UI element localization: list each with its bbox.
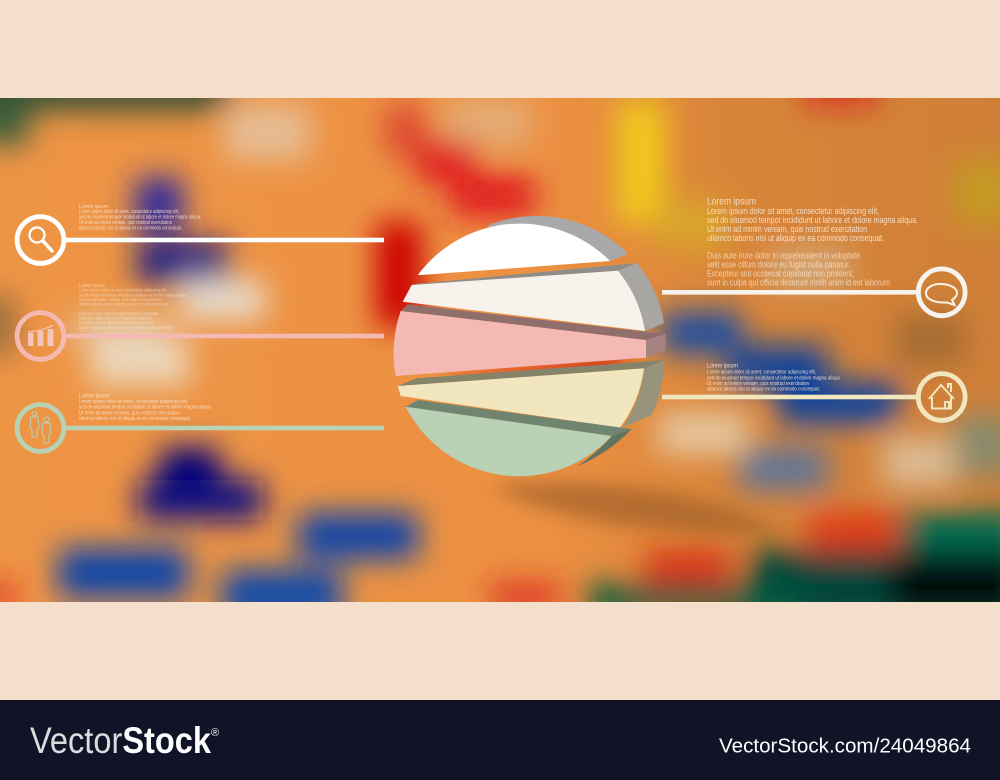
text block: velit esse cillum dolore eu fugiat nulla pariatur.: [707, 259, 850, 269]
red seen through slice gap: [440, 360, 640, 380]
text block: Lorem ipsum: [79, 283, 105, 289]
text block: sunt in culpa qui officia deserunt mollit anim id est laborum: [707, 277, 890, 287]
text block: Ut enim ad minim veniam, quis nostrud exercitation: [707, 224, 867, 234]
text block: sed do eiusmod tempor incididunt ut labore et dolore magna aliqua.: [707, 215, 918, 225]
text block: Ut enim ad minim veniam, quis nostrud exercitation: [79, 220, 172, 226]
bottom beige band: [0, 602, 1000, 700]
text block: ullamco laboris nisi ut aliquip ex ea commodo consequat.: [79, 416, 191, 422]
registered mark: ®: [211, 727, 219, 739]
connector line: [66, 238, 384, 242]
text block: Lorem ipsum dolor sit amet, consectetur adipiscing elit,: [707, 206, 879, 216]
slice 1: white: [418, 216, 628, 275]
text block: [79, 283, 187, 330]
callout 2: chart: [17, 283, 384, 359]
connector line: [662, 395, 918, 399]
text block: Lorem ipsum: [79, 392, 110, 400]
text block: [707, 196, 918, 287]
text block: Lorem ipsum dolor sit amet, consectetur adipiscing elit,: [707, 370, 816, 376]
text block: Ut enim ad minim veniam, quis nostrud exercitation: [79, 410, 180, 416]
footer id: VectorStock.com/24049864: [719, 736, 971, 758]
text block: velit esse cillum dolore eu fugiat nulla pariatur.: [79, 316, 152, 320]
footer logo: VectorStock: [30, 720, 211, 761]
text block: Excepteur sint occaecat cupidatat non proident,: [707, 268, 854, 278]
connector line: [662, 290, 918, 295]
callout 1: search: [17, 204, 384, 263]
text block: Lorem ipsum dolor sit amet, consectetur adipiscing elit,: [79, 399, 188, 405]
icon: magnifier: [17, 217, 64, 263]
icon: speech bubble: [918, 269, 965, 316]
callout 5: house: [662, 362, 965, 420]
text block: sed do eiusmod tempor incididunt ut labore et dolore magna aliqua.: [79, 405, 212, 411]
text block: Ut enim ad minim veniam, quis nostrud exercitation: [79, 297, 161, 302]
icon: growth bars: [17, 313, 64, 359]
icon: house: [918, 374, 965, 420]
text block: Duis aute irure dolor in reprehenderit in voluptate: [707, 250, 860, 260]
text block: Lorem ipsum: [79, 204, 108, 210]
text block: [79, 392, 212, 422]
text block: ullamco laboris nisi ut aliquip ex ea commodo consequat.: [707, 233, 884, 243]
text block: Lorem ipsum: [707, 196, 756, 208]
text block: Lorem ipsum dolor sit amet, consectetur adipiscing elit,: [79, 288, 167, 292]
text block: ullamco laboris nisi ut aliquip ex ea commodo consequat.: [707, 386, 820, 392]
text block: sed do eiusmod tempor incididunt ut labore et dolore magna aliqua.: [79, 214, 201, 220]
text block: sed do eiusmod tempor incididunt ut labore et dolore magna aliqua.: [79, 292, 187, 297]
panel: sliced circle diagram: [394, 216, 666, 476]
slice 5: green: [406, 400, 632, 476]
text block: [707, 362, 841, 392]
footer bar: [0, 700, 1000, 780]
text block: Ut enim ad minim veniam, quis nostrud exercitation: [707, 381, 809, 387]
text block: Duis aute irure dolor in reprehenderit in voluptate: [79, 311, 158, 316]
text block: Lorem ipsum: [707, 362, 738, 370]
text block: sed do eiusmod tempor incididunt ut labore et dolore magna aliqua.: [707, 375, 841, 381]
sphere cast shadow: [492, 482, 785, 535]
text block: Lorem ipsum dolor sit amet, consectetur adipiscing elit,: [79, 209, 179, 215]
connector line: [66, 334, 384, 338]
top beige band: [0, 0, 1000, 98]
blurred photo background: [0, 75, 1000, 625]
icon: two people: [17, 405, 64, 451]
text block: ullamco laboris nisi ut aliquip ex ea commodo consequat.: [79, 302, 169, 306]
callout 4: speech bubble: [662, 196, 965, 316]
text block: sunt in culpa qui officia deserunt mollit anim id est laborum: [79, 325, 174, 330]
slice 3: pink: [394, 304, 666, 376]
callout 3: people: [17, 392, 384, 451]
slice 4: cream: [398, 360, 664, 428]
slice 2: off-white: [403, 263, 664, 331]
text block: ullamco laboris nisi ut aliquip ex ea commodo consequat.: [79, 225, 182, 231]
connector line: [66, 426, 384, 430]
text block: [79, 204, 201, 231]
text block: Excepteur sint occaecat cupidatat non proident,: [79, 320, 154, 325]
